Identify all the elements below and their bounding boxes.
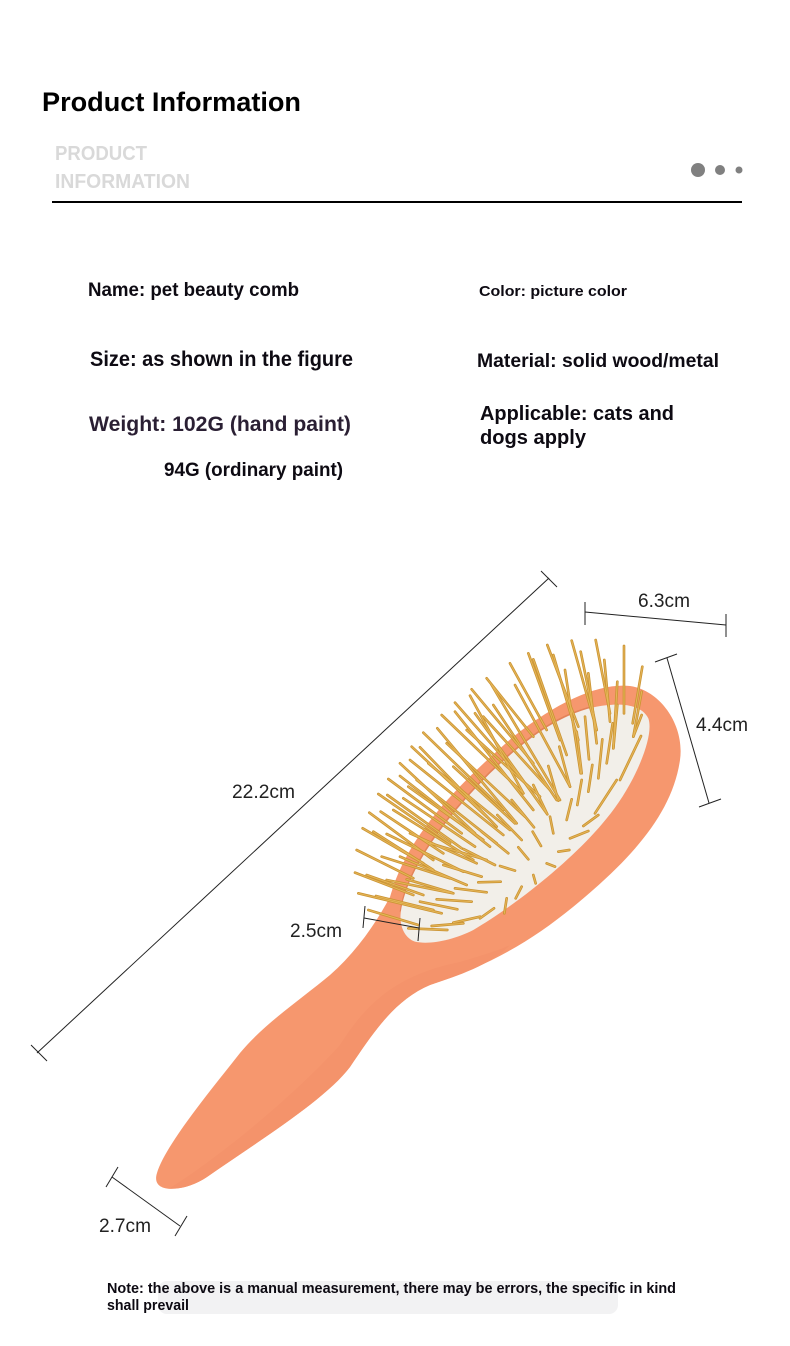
- dimension: head length 6.3cm: [585, 602, 726, 637]
- dimension: head width 4.4cm: [655, 654, 721, 807]
- dimension: length 22.2cm: [31, 571, 557, 1061]
- subtitle: INFORMATION: [55, 171, 190, 193]
- note: shall prevail: [107, 1298, 189, 1314]
- decorative dots: [691, 163, 742, 177]
- spec: applicable: Applicable: cats and: [480, 402, 674, 425]
- spec: weight: Weight: 102G (hand paint): [89, 413, 351, 436]
- label: 22.2cm: 22.2cm: [232, 782, 295, 803]
- brush body: [156, 686, 681, 1189]
- subtitle: [55, 143, 190, 193]
- brush pad and bristles: [355, 640, 650, 943]
- note: Note: the above is a manual measurement, there may be errors, the specific in kind: [107, 1281, 676, 1297]
- note: [107, 1281, 676, 1314]
- handle lower facet: [170, 945, 510, 1188]
- spec: name: Name: pet beauty comb: [88, 280, 299, 301]
- label: 2.5cm: 2.5cm: [290, 921, 342, 942]
- label: 6.3cm: 6.3cm: [638, 591, 690, 612]
- dimension: handle 2.7cm: [106, 1167, 187, 1236]
- label: 2.7cm: 2.7cm: [99, 1216, 151, 1237]
- spec: color: Color: picture color: [479, 283, 627, 300]
- spec: material: Material: solid wood/metal: [477, 350, 719, 372]
- subtitle: PRODUCT: [55, 143, 147, 165]
- spec: applicable: dogs apply: [480, 426, 587, 449]
- brush illustration: [156, 640, 681, 1189]
- spec: weight second line: 94G (ordinary paint): [164, 460, 343, 481]
- spec: applicable: [480, 402, 674, 449]
- note background pill: [158, 1281, 618, 1314]
- title: Product Information: [42, 87, 301, 117]
- label: 4.4cm: 4.4cm: [696, 715, 748, 736]
- dimension: neck 2.5cm: [363, 906, 420, 941]
- spec: size: Size: as shown in the figure: [90, 348, 353, 371]
